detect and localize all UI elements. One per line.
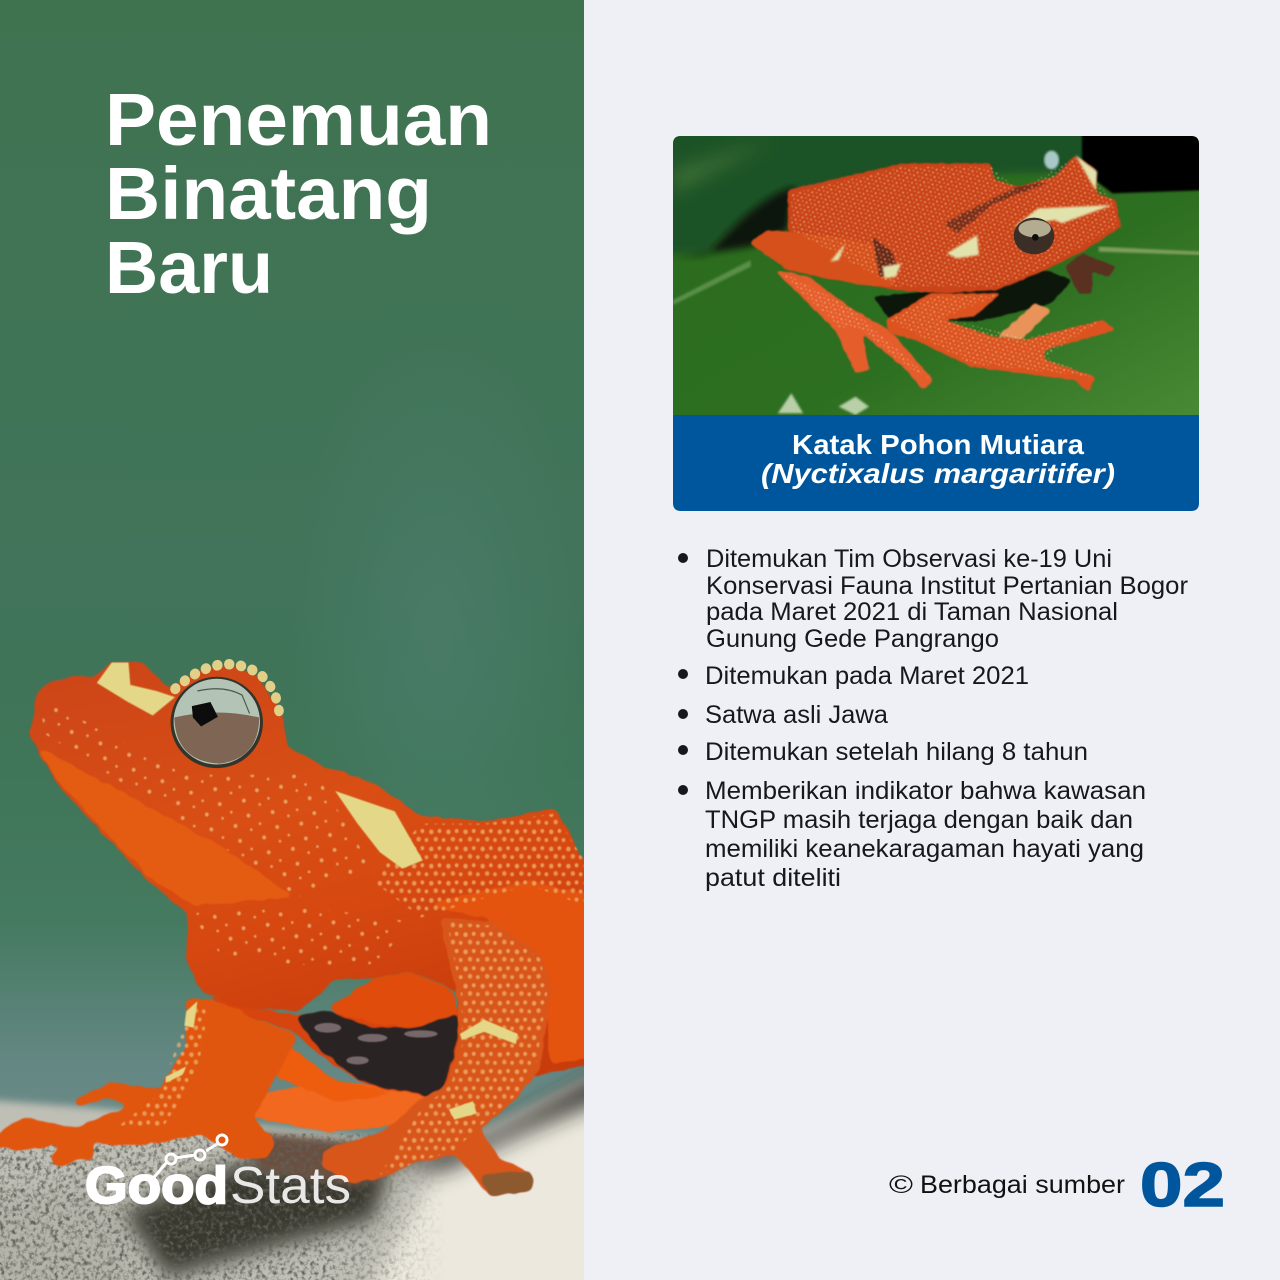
icon: frog eye [171,664,279,768]
caption: Katak Pohon Mutiara [792,429,1084,460]
panel: left frog photo [0,0,618,1280]
title: Binatang [105,152,432,235]
head and torso [30,662,618,1077]
title: Penemuan [105,78,492,161]
bullet 5: patut diteliti [705,864,841,892]
right foreleg [320,918,551,1195]
title [105,78,492,309]
lower belly [212,996,459,1097]
title: Baru [105,226,273,309]
bullet 1: Gunung Gede Pangrango [706,625,999,653]
chest gap [328,971,458,1028]
inner thigh [276,1046,386,1102]
page number: 02 [1140,1151,1225,1220]
side highlight [436,880,584,1064]
near foreleg [0,999,298,1167]
bullet 1: Ditemukan Tim Observasi ke-19 Uni [706,545,1112,573]
logo chart line icon [150,1135,227,1182]
belly pattern spots [314,1023,438,1064]
caption background [673,400,1199,511]
bullet 5 [678,777,1146,892]
frog [749,155,1121,393]
caption [761,429,1115,489]
leaf and dark background [673,136,1199,415]
dark belly pattern [296,1009,459,1098]
source note: Berbagai sumber [920,1171,1125,1199]
panel: species card [659,120,1214,511]
bullet 1: pada Maret 2021 di Taman Nasional [706,598,1118,626]
jaw highlight [37,746,294,905]
bullet 1 [678,545,1188,653]
skin speckles [778,158,1117,378]
rock [0,1064,611,1280]
rock texture [0,1134,447,1280]
far hind foot [238,1084,439,1132]
frog illustration [0,662,618,1280]
caption: (Nyctixalus margaritifer) [761,458,1115,489]
icon: small frog eye [1014,218,1054,254]
bullet 1: Konservasi Fauna Institut Pertanian Bogor [706,572,1188,600]
bullet list [678,545,1188,892]
yellow patches [97,662,518,1120]
source note: © [889,1171,914,1199]
logo: GoodStats: Stats [230,1157,351,1215]
pale patches [830,155,1112,278]
bullet 2: Ditemukan pada Maret 2021 [705,662,1029,690]
logo: GoodStats [86,1134,350,1205]
frog body parts [0,662,618,1196]
bullet 4: Ditemukan setelah hilang 8 tahun [705,738,1088,766]
photo: tree frog on leaf [673,136,1199,415]
bullet 5: Memberikan indikator bahwa kawasan [705,777,1146,805]
bullet 3: Satwa asli Jawa [705,701,888,729]
skin warts [39,697,584,1175]
foot pad [480,1171,533,1196]
bullet 5: TNGP masih terjaga dengan baik dan [705,806,1133,834]
green blurred background [0,0,584,1140]
logo: GoodStats: Good [85,1157,228,1215]
bullet 5: memiliki keanekaragaman hayati yang [705,835,1144,863]
